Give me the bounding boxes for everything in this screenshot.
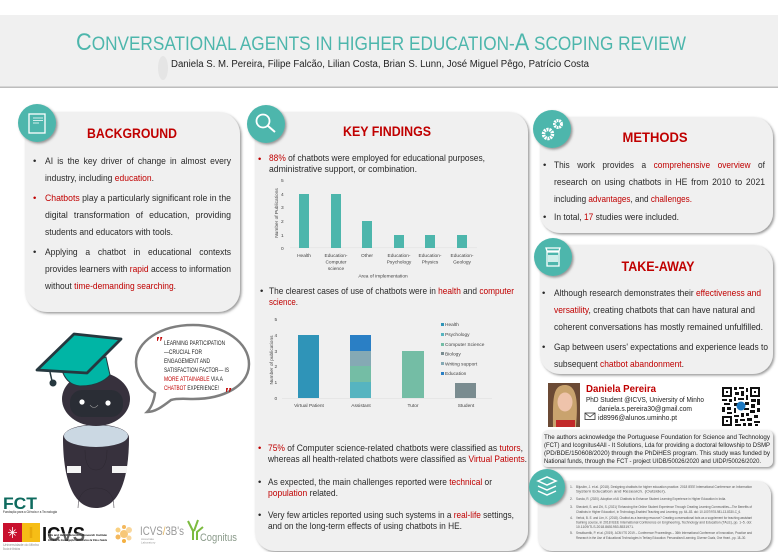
text: reference list: 4.	[570, 516, 573, 520]
text: reference list: Sunda, R. (2020). Adoption of AI Chatbots to Enhance Student Learning Experience in Higher Education in India.	[576, 497, 726, 501]
text: background bullets: Applying a chatbot in educational contexts	[45, 247, 231, 258]
title: CONVERSATIONAL AGENTS IN HIGHER EDUCATION-A SCOPING REVIEW	[76, 29, 686, 56]
text: lower findings: and on the long-term effects of using chatbots in HE.	[268, 521, 462, 532]
header band	[0, 15, 778, 88]
text: clearest cases	[260, 286, 514, 308]
heading: take-away: TAKE-AWAY	[622, 259, 694, 274]
speech bubble: "	[223, 384, 232, 403]
heading: methods: METHODS	[622, 130, 688, 145]
text: lower findings: •	[258, 477, 261, 488]
text: methods bullets: In total, 17 studies were included.	[554, 212, 679, 223]
logos	[3, 495, 237, 551]
authors: Daniela S. M. Pereira, Filipe Falcão, Lilian Costa, Brian S. Lunn, José Miguel Pêgo, Patrício Costa	[171, 59, 589, 70]
text: reference list: Sheckett, S. and Zhi, S. (2021) 'Enhancing the Online Student Experience Through Creating Learning Communities—The Benefits of	[576, 505, 752, 509]
text: 88 percent: •	[258, 154, 261, 165]
icon: book	[18, 104, 56, 142]
text: background bullets: •	[33, 156, 36, 167]
logo: FCT: Fundação para a Ciência e a Tecnologia	[3, 510, 57, 514]
text: 88 percent: administrative support, or combination.	[269, 164, 417, 175]
text: methods bullets: •	[543, 212, 546, 223]
logo: Universidade do Minho	[3, 523, 40, 551]
text: background bullets: •	[33, 247, 36, 258]
bar chart: area of implementation: 1	[281, 233, 284, 239]
text: background bullets	[33, 156, 231, 292]
text: clearest cases: The clearest cases of use of chatbots were in health and computer	[269, 286, 514, 297]
heading: background: BACKGROUND	[87, 126, 177, 141]
text: background bullets: AI is the key driver of change in almost every	[45, 156, 231, 167]
icon: gears	[533, 110, 571, 148]
text: reference list: 1.	[570, 485, 573, 489]
bar chart: area of implementation: 0	[281, 246, 284, 252]
logo: ICVS: ICVS	[42, 524, 85, 546]
author details: daniela.s.pereira30@gmail.com	[598, 406, 692, 413]
text: take-away bullets: subsequent chatbot abandonment.	[554, 359, 684, 370]
text: reference list: 10.1109/TLS.2018.8651953.8531971.	[576, 525, 634, 529]
bar chart: area of implementation: Computer	[325, 260, 347, 266]
text: take-away bullets: versatility, creating chatbots that can have natural and	[554, 305, 755, 316]
bar chart: area of implementation: Psychology	[387, 260, 412, 266]
stacked bar chart: publications by type: 3	[274, 349, 278, 355]
panel: key findings	[247, 105, 528, 551]
panel: references	[529, 469, 771, 551]
text: lower findings: Very few articles reported using such systems in a real-life settings,	[268, 510, 514, 521]
logo: ICVS/3B's	[116, 524, 184, 544]
stacked bar chart: publications by type: Student	[458, 403, 475, 409]
stacked bar chart: publications by type: Virtual Patient	[294, 403, 325, 409]
text: take-away bullets: Although research demonstrates their effectiveness and	[554, 288, 761, 299]
bar chart: area of implementation: Education-	[325, 253, 348, 259]
icon: stacked books	[529, 469, 565, 505]
text: background bullets: •	[33, 193, 36, 204]
text: reference list: Verlok, B. E. and Lim, K. (2018). Chatbot as a learning resource? Creating conversational bots as a supplement for teaching assistant	[576, 516, 752, 520]
text: clearest cases: •	[260, 286, 263, 297]
bar chart: area of implementation: science	[328, 266, 344, 272]
icon: cup	[534, 238, 572, 276]
stacked bar chart: publications by type: 4	[274, 333, 278, 339]
panel: methods	[533, 110, 773, 233]
text: reference list: Bijuslim, J. et al. (2018). Designing chatbots for higher education practice. 2018 IEEE International Conference on Information	[576, 485, 752, 489]
bar chart: area of implementation: Area of implementation	[358, 274, 408, 280]
legend: Education	[445, 371, 467, 377]
author photo	[548, 383, 580, 427]
text: lower findings: whereas all health-related chatbots were classified as Virtual Patients.	[267, 454, 527, 465]
text: background bullets: digital transformation of education, providing	[45, 210, 231, 221]
text: lower findings: 75% of Computer science-related chatbots were classified as tutors,	[268, 443, 523, 454]
bar chart: area of implementation: 2	[281, 219, 284, 225]
acknowledgements box	[542, 430, 773, 467]
panel: background	[18, 104, 240, 312]
text: reference list: 5.	[570, 531, 573, 535]
speech bubble: ENGAGEMENT AND	[164, 358, 210, 365]
legend: Writing support	[445, 362, 478, 368]
logo: FCT: FCT	[3, 495, 37, 513]
bar chart: area of implementation: 4	[281, 192, 284, 198]
speech bubble: "	[154, 333, 163, 352]
text: 88 percent	[258, 153, 485, 175]
text: reference list: 3.	[570, 505, 573, 509]
stacked bar chart: publications by type: Tutor	[407, 403, 419, 409]
text: 88 percent: 88% of chatbots were employed for educational purposes,	[269, 153, 485, 164]
bar chart: area of implementation: 3	[281, 205, 284, 211]
text: lower findings: As expected, the main challenges reported were technical or	[268, 477, 492, 488]
text: methods bullets: This work provides a comprehensive overview of	[554, 160, 765, 171]
bar chart: area of implementation: Number of Publications	[274, 188, 280, 238]
QR code	[722, 387, 760, 426]
text: reference list: System Education and Research. (Outsider).	[576, 490, 666, 494]
bar chart: area of implementation: 5	[281, 178, 284, 184]
text: reference list: 2.	[570, 497, 573, 501]
stacked bar chart: publications by type: Assistant	[351, 403, 371, 409]
icon: magnifier	[247, 105, 285, 143]
text: background bullets: industry, including education.	[45, 173, 154, 184]
logo: ICVS: Instituto de Investigação em Ciências da Vida e Saúde	[48, 538, 107, 542]
legend: Computer Science	[445, 342, 485, 348]
logo: Universidade do Minho: Universidade do Minho	[3, 543, 39, 547]
text: take-away bullets: •	[542, 288, 545, 299]
bar chart: area of implementation: Education-	[388, 253, 411, 259]
speech bubble: SATISFACTION FACTOR— IS	[164, 367, 229, 374]
logo: Cognitus	[188, 520, 237, 544]
text: reference list	[570, 485, 752, 540]
text: lower findings: •	[258, 443, 261, 454]
text: background bullets: students and educators with tools.	[45, 227, 173, 238]
logo: ICVS/3B's: Laboratory	[141, 540, 156, 544]
text: reference list: training course, in 2018 IEEE International Conference on Engineering, Technology and Education (TALE), pp. 1–5. doi:	[576, 520, 752, 524]
stacked bar chart: publications by type: 2	[274, 364, 278, 370]
text: methods bullets	[543, 160, 765, 223]
legend: Psychology	[445, 332, 470, 338]
bar chart: area of implementation: Education-	[419, 253, 442, 259]
illustration: robot with graduation cap	[37, 334, 130, 508]
legend: Biology	[445, 352, 461, 358]
logo: Cognitus: Cognitus	[200, 532, 237, 544]
author details: PhD Student @ICVS, University of Minho	[586, 397, 704, 404]
text: take-away bullets: •	[542, 342, 545, 353]
logo: ICVS/3B's: ICVS/3B's	[140, 524, 184, 538]
text: methods bullets: •	[543, 160, 546, 171]
speech bubble: LEARNING PARTICIPATION	[164, 340, 225, 347]
stacked bar chart: publications by type: 5	[274, 317, 278, 323]
stacked bar chart: publications by type: 1	[274, 380, 278, 386]
legend	[441, 322, 485, 377]
text: methods bullets: including advantages, and challenges.	[554, 194, 692, 205]
bar chart: area of implementation: Geology	[453, 260, 472, 266]
logo: Universidade do Minho: Escola de Medicina	[3, 547, 20, 551]
text: reference list: Research in the Use of Educational Technologies in Tertiary Education: Personalised Learning. Diverse Goals, One Heart., pp. 18–30.	[576, 536, 746, 540]
text: reference list: Chatbots in Higher Education', in Technology-Enabled Teaching and Learning, pp. 64–83. doi: 10.1007/978-981-13-8330-C_6.	[576, 510, 741, 514]
stacked bar chart: publications by type	[269, 317, 492, 409]
bar chart: area of implementation	[274, 178, 477, 280]
text: clearest cases: science.	[269, 297, 298, 308]
text: background bullets: provides learners with rapid access to information	[45, 264, 231, 275]
logo: FCT	[3, 495, 57, 514]
bar chart: area of implementation: Other	[361, 253, 373, 259]
legend: Health	[445, 322, 459, 328]
heading: key findings: KEY FINDINGS	[343, 124, 431, 139]
author details: id8996@alunos.uminho.pt	[598, 415, 677, 422]
icon: envelope	[585, 413, 595, 420]
speech bubble: MORE ATTAINABLE VIA A	[164, 376, 224, 383]
speech bubble: CHATBOT EXPERIENCE!	[164, 385, 219, 392]
bar chart: area of implementation: Education-	[451, 253, 474, 259]
author details	[585, 383, 704, 422]
bar chart: area of implementation: Physics	[422, 260, 439, 266]
speech bubble	[136, 325, 249, 412]
text: background bullets: Chatbots play a particularly significant role in the	[45, 193, 231, 204]
text: lower findings: •	[258, 510, 261, 521]
text: take-away bullets	[542, 288, 768, 370]
panel: take-away	[534, 238, 773, 374]
stacked bar chart: publications by type: Number of publications	[269, 335, 275, 385]
bar chart: area of implementation: Health	[297, 253, 311, 259]
logo: ICVS/3B's: Associate	[141, 537, 154, 541]
text: lower findings	[258, 443, 527, 532]
logo: ICVS: Life and Health Sciences Research Institute	[48, 533, 107, 537]
author details: Daniela Pereira	[586, 383, 656, 395]
text: lower findings: population related.	[268, 488, 338, 499]
stacked bar chart: publications by type: 0	[274, 396, 278, 402]
text: reference list: Smutkumtik, P. et al. (2019). ACM ITS 2019 – Conference Proceedings – 36th International Conference of Innovation, Practice and	[576, 531, 752, 535]
text: background bullets: without time-demanding searching.	[44, 281, 176, 292]
speech bubble: —CRUCIAL FOR	[164, 349, 202, 356]
